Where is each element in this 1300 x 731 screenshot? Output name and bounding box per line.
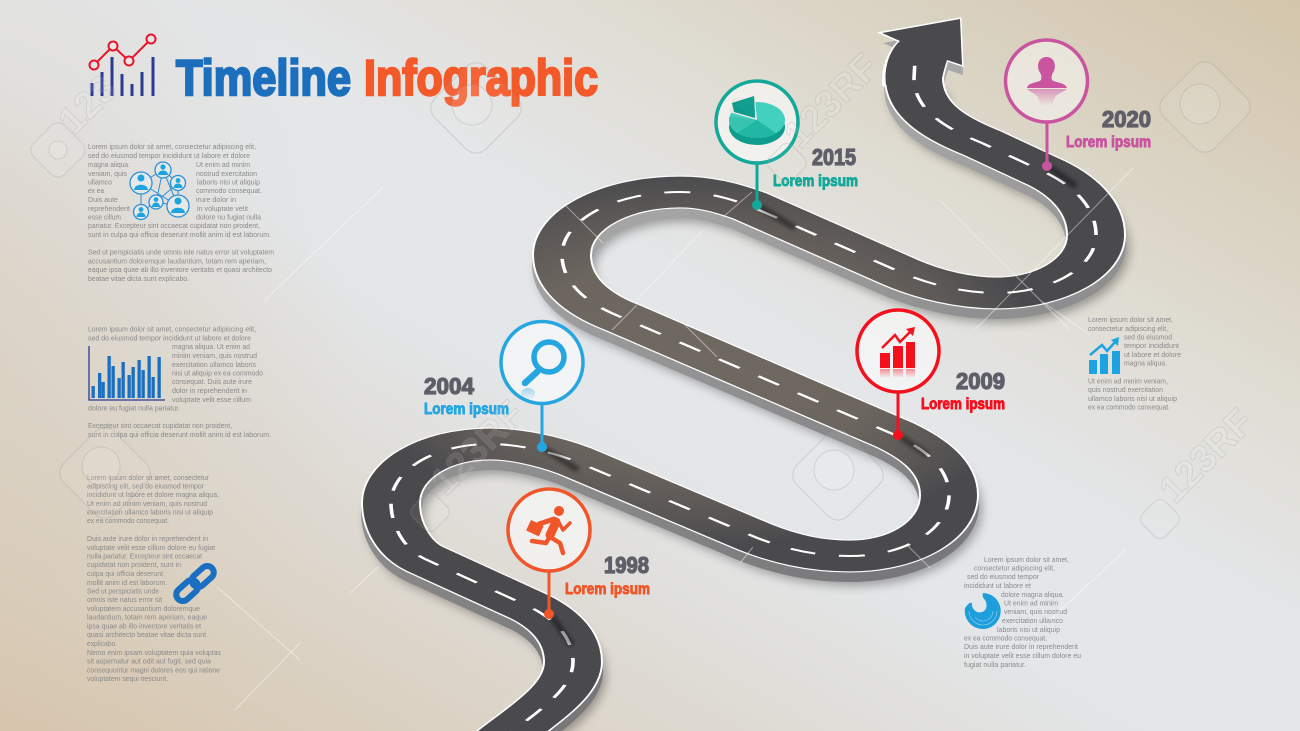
text block: bottom right: fugiat nulla pariatur. (964, 660, 1026, 669)
text block: bar chart: voluptate velit esse cillum (172, 395, 251, 404)
icon: running businessman (526, 506, 570, 553)
pin: 2015 (716, 81, 798, 228)
text block: top right: ullamco laboris nisi ut aliquip (1088, 394, 1177, 403)
text block: chain: incididunt ut labore et dolore magna aliqua. (87, 490, 219, 499)
text block: bottom right: dolore magna aliqua. (1001, 590, 1064, 599)
text block: chain: laudantium, totam rem aperiam, eaque (87, 612, 207, 622)
text block: chain (87, 473, 221, 683)
text block: bar chart: magna aliqua. Ut enim ad (172, 342, 250, 351)
text block: network: accusantium doloremque laudantium, totam rem aperiam, (88, 256, 266, 266)
label: 2020 (1066, 106, 1151, 151)
text block: chain: Sed ut perspiciatis unde (87, 586, 159, 596)
text block: bottom right: in voluptate velit esse cillum dolore eu (964, 651, 1081, 660)
text block: chain: Lorem ipsum dolor sit amet, consectetur (87, 473, 209, 482)
text block: chain: ex ea commodo consequat. (87, 516, 169, 525)
icon: person bust (1027, 57, 1067, 106)
text block: chain: exercitation ullamco laboris nisi ut aliquip (87, 508, 213, 516)
text block: network: veniam, quis (88, 169, 127, 178)
pin: 2004 (501, 322, 583, 470)
label: 2020: 2020 (1102, 106, 1151, 132)
text block: network: eaque ipsa quae ab illo inventore veritatis et quasi architecto (88, 265, 272, 274)
text block: chain: omnis iste natus error sit (87, 595, 162, 604)
text block: network: reprehenderit (88, 204, 130, 213)
text block: bar chart: dolore eu fugiat nulla pariatur. (88, 404, 180, 412)
text block: bottom right: exercitation ullamco (1002, 616, 1063, 625)
text block: bottom right: Ut enim ad minim (1004, 598, 1058, 608)
icon: 3D pie chart (729, 96, 785, 145)
icon: radial pie (965, 593, 1001, 629)
text: 123RF (777, 46, 887, 156)
pin: 2020 (1006, 40, 1088, 186)
text block: top right: consectetur adipiscing elit, (1088, 324, 1168, 333)
text block: chain: explicabo. (87, 639, 117, 648)
text block: bar chart: minim veniam, quis nostrud (172, 351, 257, 360)
pin: 2009 (857, 310, 939, 455)
text block: network: Sed ut perspiciatis unde omnis iste natus error sit voluptatem (88, 248, 274, 256)
text block: network: Ut enim ad minim (196, 160, 250, 169)
label: 2015: 2015 (812, 144, 856, 170)
text block: bottom right: consectetur adipiscing elit, (974, 564, 1055, 572)
text: 123 (51, 68, 125, 142)
text block: bar chart: dolor in reprehenderit in (172, 386, 247, 395)
label: 1998: Lorem ipsum (565, 581, 650, 598)
text block: bottom right: incididunt ut labore et (964, 581, 1031, 590)
text block: bottom right: sed do eiusmod tempor (967, 572, 1040, 581)
text block: chain: culpa qui officia deserunt (87, 569, 163, 578)
text: 123RF (423, 393, 533, 503)
icon: column chart (89, 346, 165, 400)
text block: bottom right: Lorem ipsum dolor sit amet, (984, 555, 1069, 564)
text block: bottom right (964, 555, 1081, 669)
icon: chain link (174, 563, 216, 604)
text block: network: laboris nisi ut aliquip (197, 178, 260, 186)
text block: network: dolore nu fugiat nulla (196, 212, 262, 222)
label: 1998 (565, 552, 650, 598)
title: Infographic (364, 50, 598, 106)
text block: network: ullamco (88, 178, 112, 186)
icon: rising bar chart (880, 327, 915, 378)
text block: top right (1088, 315, 1181, 412)
text block: chain: Duis aute irure dolor in reprehenderit in (87, 534, 208, 543)
icon: people network (130, 162, 189, 220)
icon: magnifying glass (521, 342, 564, 400)
text block: chain: sit aspernatur aut odit aut fugit, sed quia (87, 656, 212, 666)
text block: bar chart: sed do eiusmod tempor incididunt ut labore et dolore (88, 334, 251, 342)
text block: chain: voluptate velit esse cillum dolore eu fugiat (87, 543, 215, 552)
text block: bottom right: Duis aute irure dolor in reprehenderit (964, 642, 1078, 651)
text block: chain: cupidatat non proident, sunt in (87, 560, 181, 569)
label: 2020: Lorem ipsum (1066, 134, 1151, 151)
text block: chain: Nemo enim ipsam voluptatem quia voluptas (87, 648, 221, 657)
text block: chain: Ut enim ad minim veniam, quis nostrud (87, 499, 207, 508)
text block: bottom right: laboris nisi ut aliquip (997, 625, 1060, 634)
text block: bottom right: ex ea commodo consequat. (964, 634, 1047, 642)
text block: network: magna aliqua. (88, 160, 130, 169)
icon: growth bars (1089, 337, 1120, 374)
text block: network: pariatur. Excepteur sint occaecat cupidatat non proident, (88, 221, 260, 230)
text block: network: Lorem ipsum dolor sit amet, consectetur adipiscing elit, (88, 142, 256, 151)
text block: bar chart: Excepteur sint occaecat cupidatat non proident, (88, 421, 232, 430)
text block: chain: mollit anim id est laborum. (87, 578, 167, 587)
text block: network: beatae vitae dicta sunt explicabo. (88, 274, 189, 283)
label: 2009: Lorem ipsum (921, 396, 1005, 413)
title icon: chart with trend line (90, 34, 156, 96)
text block: top right: Ut enim ad minim veniam, (1088, 376, 1168, 386)
text block: bar chart: Lorem ipsum dolor sit amet, consectetur adipiscing elit, (88, 324, 256, 334)
pin: 1998 (508, 489, 590, 645)
text block: bar chart (88, 324, 271, 439)
text block: network: sunt in culpa qui officia deserunt mollit anim id est laborum. (88, 230, 271, 239)
text block: network: commodo consequat. (196, 186, 262, 195)
text block: bar chart: consequat. Duis aute irure (172, 377, 252, 386)
label: 2004: Lorem ipsum (424, 401, 509, 418)
text block: top right: tempor incididunt (1124, 341, 1179, 350)
text block: chain: consequuntur magni dolores eos qui ratione (87, 666, 220, 674)
text block: bottom right: veniam, quis nostrud (1004, 607, 1067, 616)
text block: top right: ut labore et dolore (1124, 350, 1181, 359)
label: 1998: 1998 (604, 552, 649, 578)
text block: network: esse cillum (88, 212, 121, 222)
text block: network: sed do eiusmod tempor incididunt ut labore et dolore (88, 151, 250, 160)
text block: top right: Lorem ipsum dolor sit amet, (1088, 315, 1173, 324)
text: 123RF (1152, 401, 1262, 511)
text block: bar chart: nisi ut aliquip ex ea commodo (172, 368, 263, 378)
title (176, 50, 598, 106)
label: 2015 (773, 144, 858, 190)
text block: chain: nulla pariatur. Excepteur sint occaecat (87, 552, 202, 560)
label: 2004 (424, 373, 509, 418)
text block: bar chart: sunt in culpa qui officia deserunt mollit anim id est laborum. (88, 430, 271, 439)
label: 2015: Lorem ipsum (773, 173, 858, 190)
title: Timeline (176, 50, 351, 106)
label: 2009 (921, 368, 1005, 413)
text block: chain: voluptatem sequi nesciunt. (87, 674, 168, 683)
text block: network: irure dolor in (196, 195, 236, 204)
text block: top right: ex ea commodo consequat. (1088, 402, 1170, 412)
label: 2004: 2004 (424, 373, 474, 399)
text block: chain: ipsa quae ab illo inventore veritatis et (87, 622, 201, 630)
text block: network: ex ea (88, 186, 105, 195)
text block: network (88, 142, 274, 283)
text block: chain: quasi architecto beatae vitae dicta sunt (87, 630, 206, 639)
text block: top right: magna aliqua. (1124, 358, 1167, 368)
text block: top right: quis nostrud exercitation (1088, 385, 1163, 394)
text block: chain: voluptatem accusantium doloremque (87, 604, 200, 613)
text block: bar chart: exercitation ullamco laboris (172, 360, 256, 369)
text block: chain: adipiscing elit, sed do eiusmod tempor (87, 482, 204, 490)
label: 2009: 2009 (956, 368, 1005, 394)
text block: network: nostrud exercitation (196, 169, 257, 178)
text block: network: in voluptate velit (197, 204, 248, 213)
road: winding isometric highway with arrow head (391, 19, 1100, 731)
text block: top right: sed do eiusmod (1124, 332, 1172, 342)
text block: network: Duis aute (88, 195, 118, 204)
